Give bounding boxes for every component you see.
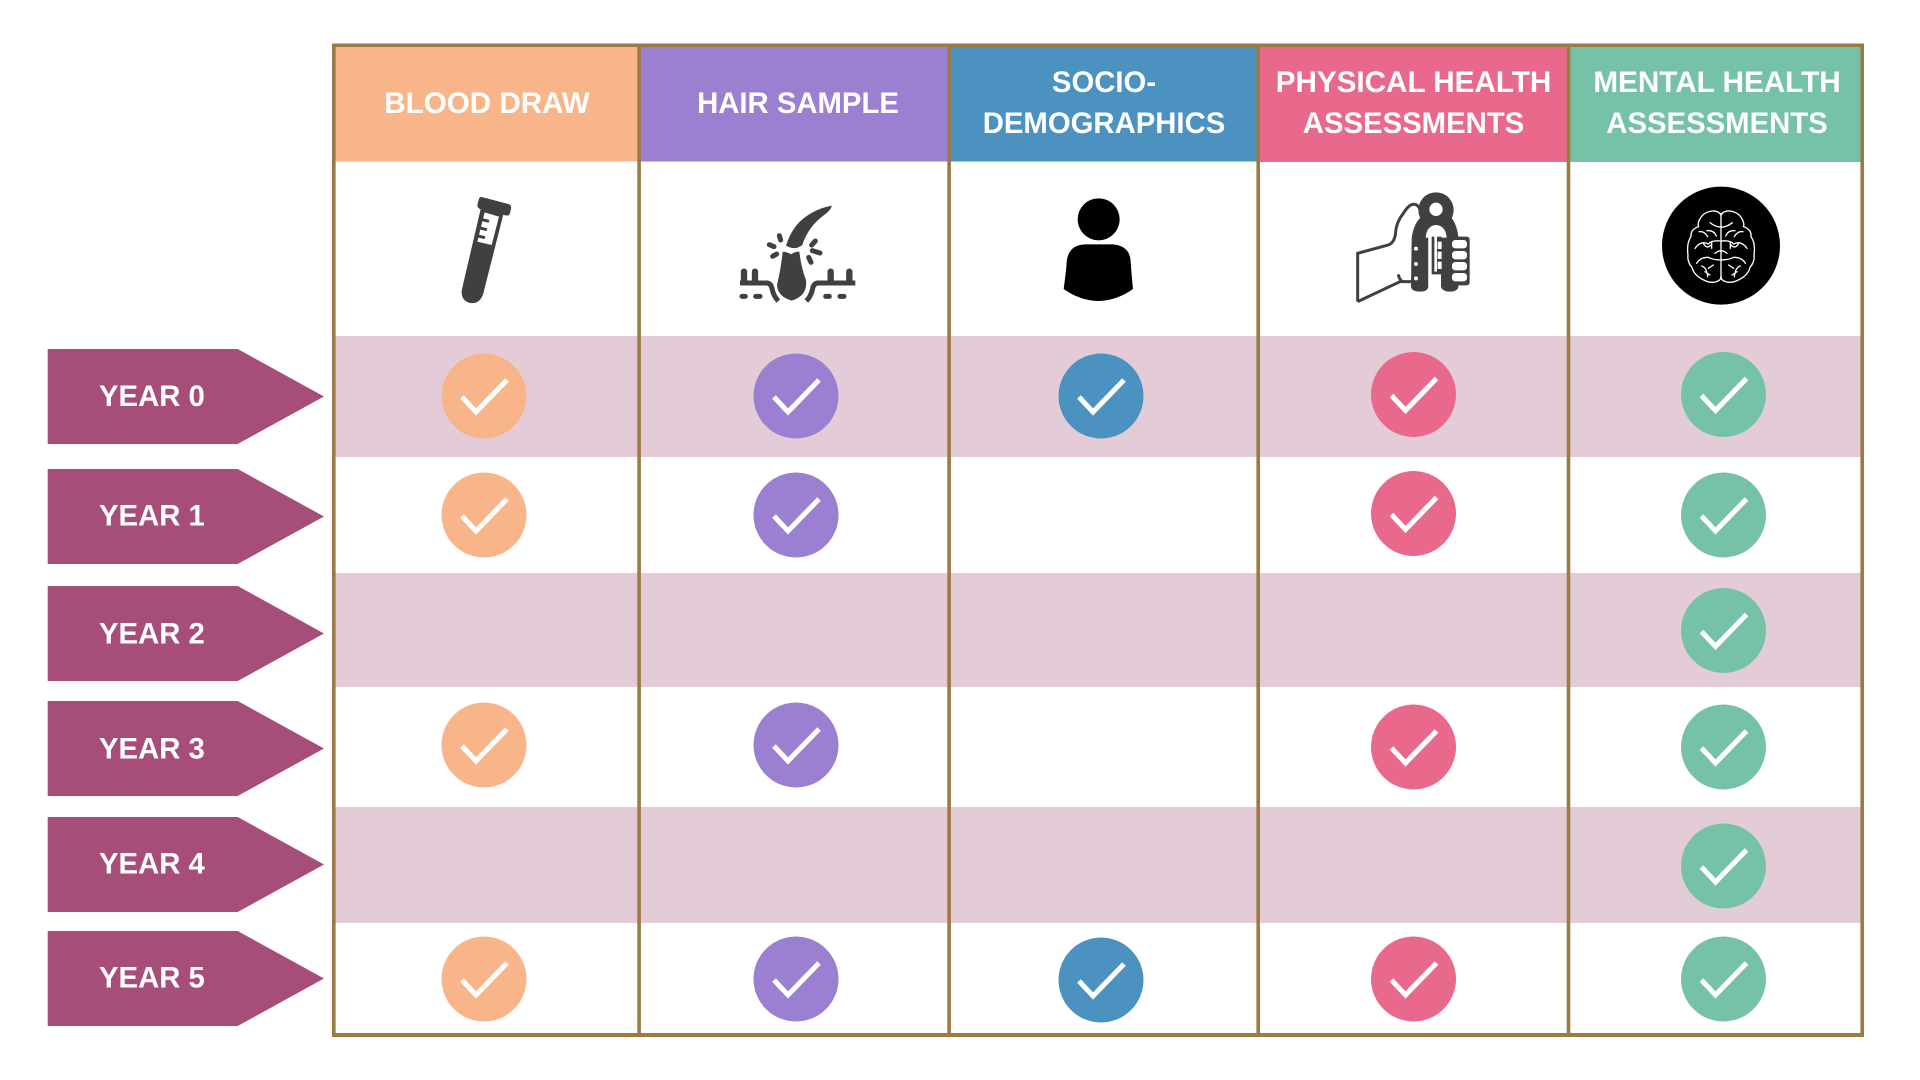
check: mental health, year 3 [1681,704,1766,790]
check: socio-demographics, year 0 [1058,354,1144,438]
header: socio-demographics [949,45,1258,162]
header: mental health assessments [1569,45,1862,162]
check: hair sample, year 0 [754,354,838,438]
check: blood draw, year 3 [442,702,526,788]
header: blood draw: BLOOD DRAW [384,87,590,120]
check: blood draw, year 5 [442,936,526,1022]
icon: hand grip dynamometer [1358,192,1470,302]
header: hair sample: HAIR SAMPLE [697,87,899,120]
check: hair sample, year 3 [754,702,838,788]
check: blood draw, year 0 [442,354,526,438]
check: socio-demographics, year 5 [1058,938,1144,1022]
row band: year 2 [334,573,1862,687]
arrow: year 1 [48,469,324,564]
header: blood draw [334,45,639,162]
arrow: year 1: YEAR 1 [99,500,205,532]
row band: year 0 [334,336,1862,457]
icon: test tube [462,197,511,303]
icon: brain [1662,187,1780,305]
header: mental health assessments: MENTAL HEALTH [1593,66,1841,99]
check: mental health, year 4 [1681,824,1766,908]
arrow: year 0 [48,349,324,444]
arrow: year 5: YEAR 5 [99,962,205,994]
check: mental health, year 5 [1681,936,1766,1022]
icon: person [1064,198,1133,301]
arrow: year 2: YEAR 2 [99,618,205,650]
header: socio-demographics: SOCIO- [1052,66,1156,99]
check: mental health, year 1 [1681,472,1766,558]
arrow: year 4: YEAR 4 [99,848,206,880]
check: physical health, year 1 [1371,471,1456,556]
icon: hair follicle [740,206,855,301]
check: physical health, year 5 [1371,936,1456,1022]
header: physical health assessments [1258,45,1569,162]
header: socio-demographics: DEMOGRAPHICS [983,107,1225,140]
row band: year 4 [334,807,1862,923]
arrow: year 5 [48,931,324,1026]
header: mental health assessments: ASSESSMENTS [1606,107,1828,140]
check: blood draw, year 1 [442,472,526,558]
arrow: year 0: YEAR 0 [99,380,205,413]
check: physical health, year 0 [1371,352,1456,437]
header: physical health assessments: ASSESSMENTS [1303,107,1524,140]
arrow: year 3 [48,701,324,796]
check: hair sample, year 5 [754,936,838,1022]
header: physical health assessments: PHYSICAL HEALTH [1276,66,1551,99]
header: hair sample [639,45,949,162]
arrow: year 4 [48,817,324,912]
check: mental health, year 0 [1681,352,1766,437]
check: mental health, year 2 [1681,588,1766,673]
arrow: year 2 [48,586,324,681]
check: physical health, year 3 [1371,704,1456,790]
check: hair sample, year 1 [754,472,838,558]
table grid [332,44,1864,1037]
arrow: year 3: YEAR 3 [99,732,205,766]
